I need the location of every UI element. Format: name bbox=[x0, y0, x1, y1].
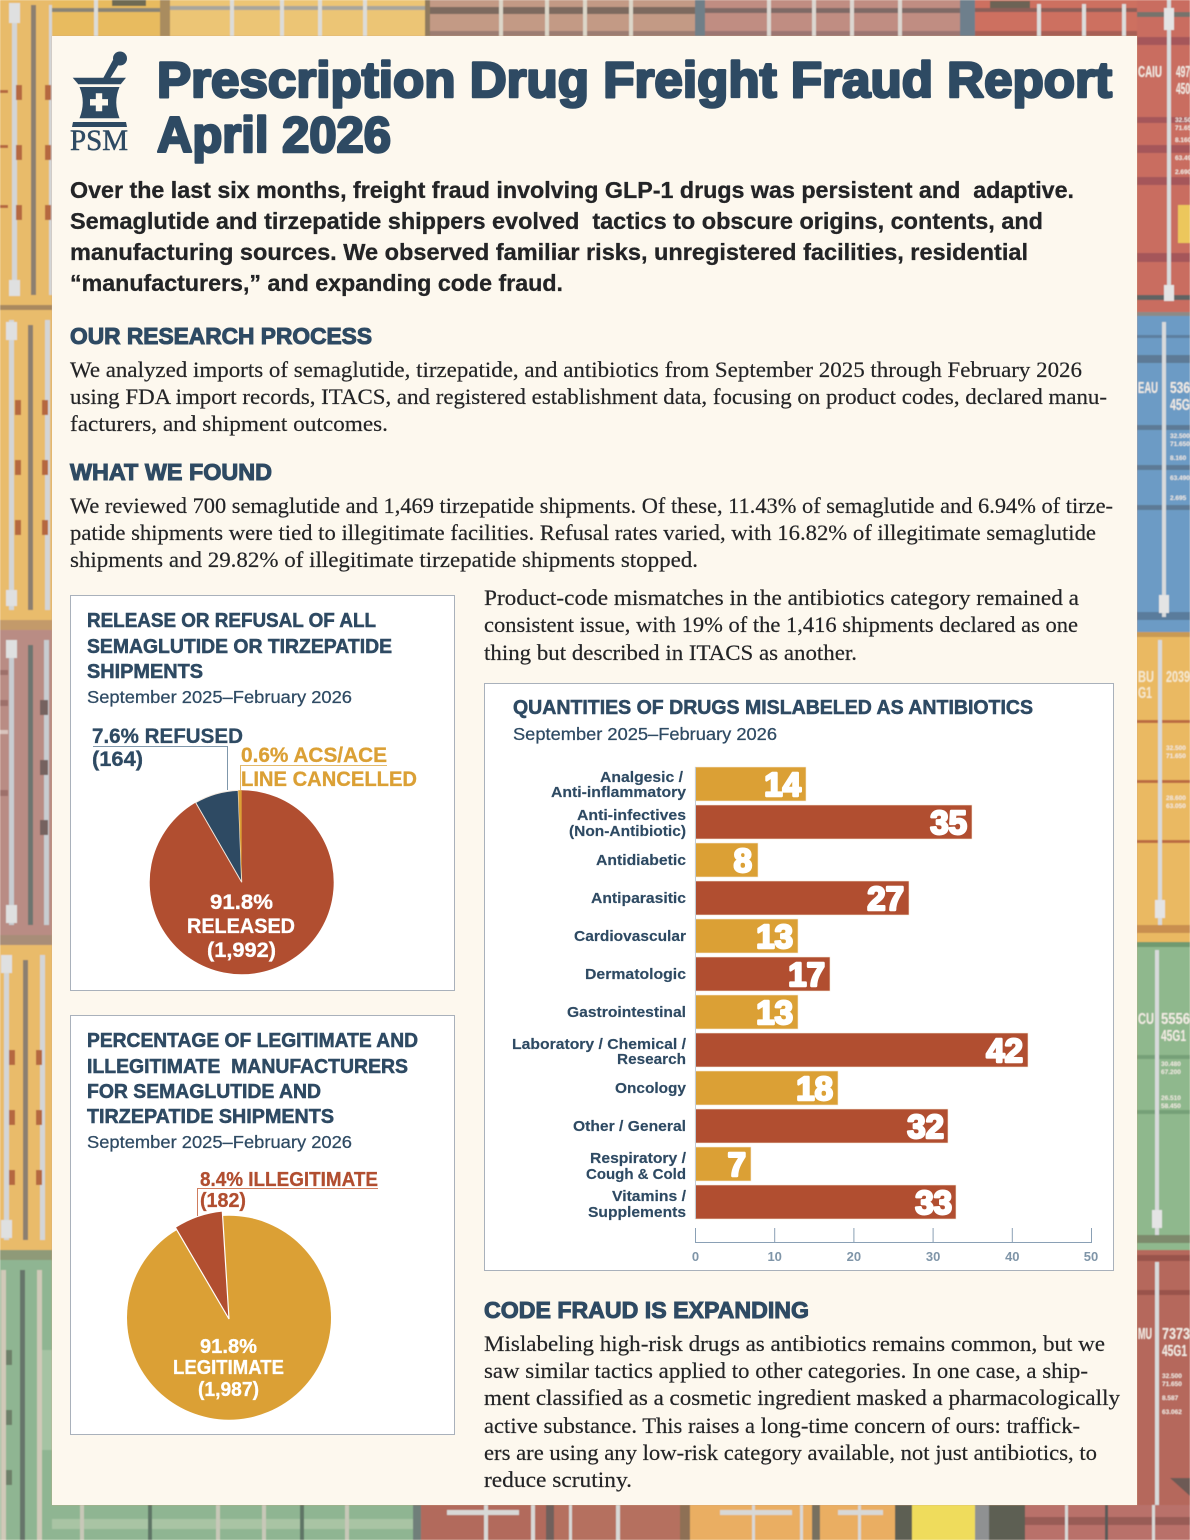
bar chart x axis: 0 bbox=[692, 1249, 699, 1264]
intro summary text bbox=[70, 177, 1074, 296]
chart heading: release or refusal: SHIPMENTS bbox=[87, 661, 203, 683]
background: stacked shipping containers: 8.587 bbox=[1162, 1395, 1179, 1402]
bar value labels: 14 bbox=[764, 766, 802, 803]
intro summary text: Over the last six months, freight fraud involving GLP-1 drugs was persistent and adaptive. bbox=[70, 177, 1074, 203]
bar chart category labels: Analgesic / bbox=[600, 769, 684, 786]
text: code fraud: ment classified as a cosmetic ingredient masked a pharmacologically bbox=[484, 1385, 1120, 1410]
background: stacked shipping containers: 26.510 bbox=[1161, 1095, 1181, 1102]
background: stacked shipping containers: 71.650 bbox=[1170, 441, 1190, 448]
text: product-code mismatches bbox=[484, 585, 1079, 665]
bar value labels: 8 bbox=[734, 842, 752, 879]
background: stacked shipping containers: 58.450 bbox=[1161, 1103, 1181, 1110]
title bbox=[157, 52, 1112, 163]
title: April 2026 bbox=[157, 107, 391, 163]
icon: PSM mortar and pestle logo: PSM bbox=[70, 124, 128, 157]
bar chart x axis: 10 bbox=[767, 1249, 782, 1264]
bar chart x axis: 30 bbox=[926, 1249, 940, 1264]
bar chart category labels: (Non-Antibiotic) bbox=[569, 823, 686, 840]
background: stacked shipping containers: 71.650 bbox=[1166, 753, 1186, 760]
bar chart category labels: Oncology bbox=[615, 1080, 687, 1097]
text: code fraud: ers are using any low-risk category available, not just antibiotics, to bbox=[484, 1440, 1097, 1465]
pie chart: legitimate and illegitimate bbox=[127, 1211, 331, 1420]
text: code fraud bbox=[484, 1331, 1120, 1492]
text: research process: We analyzed imports of semaglutide, tirzepatide, and antibiotics from September 2025 through February 2026 bbox=[70, 357, 1082, 382]
title: Prescription Drug Freight Fraud Report bbox=[157, 52, 1112, 108]
bar value labels: 35 bbox=[930, 804, 967, 841]
bar value labels: 42 bbox=[986, 1032, 1023, 1069]
chart heading: release or refusal bbox=[87, 610, 392, 707]
background: stacked shipping containers: CAIU bbox=[1138, 64, 1162, 81]
text: findings: We reviewed 700 semaglutide and 1,469 tirzepatide shipments. Of these, 11.43% of semaglutide and 6.94% of tirze- bbox=[70, 493, 1113, 518]
bar value labels: 33 bbox=[915, 1184, 952, 1221]
text: code fraud: saw similar tactics applied to other categories. In one case, a ship- bbox=[484, 1358, 1088, 1383]
bar value labels: 27 bbox=[867, 880, 904, 917]
text: research process bbox=[70, 357, 1107, 436]
text: code fraud: active substance. This raises a long-time concern of ours: traffick- bbox=[484, 1413, 1080, 1438]
intro summary text: Semaglutide and tirzepatide shippers evolved tactics to obscure origins, contents, and bbox=[70, 208, 1043, 234]
background: stacked shipping containers: 28.600 bbox=[1166, 795, 1186, 802]
text: findings: shipments and 29.82% of illegitimate tirzepatide shipments stopped. bbox=[70, 547, 698, 572]
chart heading: manufacturers: ILLEGITIMATE MANUFACTURERS bbox=[87, 1056, 408, 1078]
text: product-code mismatches: consistent issue, with 19% of the 1,416 shipments declared as one bbox=[484, 612, 1078, 637]
pie label: legitimate: LEGITIMATE bbox=[173, 1357, 284, 1379]
text: findings: patide shipments were tied to illegitimate facilities. Refusal rates varied, with 16.82% of illegitimate semaglutide bbox=[70, 520, 1096, 545]
bar chart category labels: Laboratory / Chemical / bbox=[512, 1036, 687, 1053]
background: stacked shipping containers: 8.160 bbox=[1170, 455, 1187, 462]
panel: mislabeled drug quantities bar chart bbox=[484, 684, 1114, 1270]
background: stacked shipping containers: CU bbox=[1138, 1011, 1154, 1028]
background: stacked shipping containers: 32.500 bbox=[1162, 1373, 1182, 1380]
background: stacked shipping containers: 71.650 bbox=[1162, 1381, 1182, 1388]
background: stacked shipping containers: 30.480 bbox=[1161, 1061, 1181, 1068]
text: research process: using FDA import records, ITACS, and registered establishment data, focusing on product codes, declared manu- bbox=[70, 384, 1107, 409]
pie label: released: RELEASED bbox=[187, 915, 295, 938]
background: stacked shipping containers: 32.500 bbox=[1170, 433, 1190, 440]
chart heading: manufacturers: TIRZEPATIDE SHIPMENTS bbox=[87, 1106, 334, 1128]
text: product-code mismatches: Product-code mismatches in the antibiotics category remained a bbox=[484, 585, 1079, 610]
bar value labels bbox=[728, 766, 1023, 1221]
heading: what we found: WHAT WE FOUND bbox=[70, 459, 272, 485]
text: research process: facturers, and shipment outcomes. bbox=[70, 411, 388, 436]
bar chart category labels: Antidiabetic bbox=[596, 852, 686, 869]
background: stacked shipping containers: G1 bbox=[1138, 685, 1152, 702]
callout: ACS/ACE line cancelled: LINE CANCELLED bbox=[241, 768, 417, 791]
background: stacked shipping containers: 63.062 bbox=[1162, 1409, 1182, 1416]
background: stacked shipping containers: BU bbox=[1138, 669, 1154, 686]
bar value labels: 7 bbox=[728, 1146, 746, 1183]
bar value labels: 17 bbox=[788, 956, 825, 993]
bar chart category labels: Other / General bbox=[573, 1118, 686, 1135]
bar chart category labels: Gastrointestinal bbox=[567, 1004, 686, 1021]
pie label: released bbox=[187, 891, 295, 962]
bar value labels: 18 bbox=[796, 1070, 833, 1107]
bar value labels: 13 bbox=[756, 994, 793, 1031]
bar value labels: 32 bbox=[907, 1108, 944, 1145]
pie label: legitimate: 91.8% bbox=[200, 1336, 257, 1358]
text: code fraud: Mislabeling high-risk drugs as antibiotics remains common, but we bbox=[484, 1331, 1105, 1356]
callout: refused: 7.6% REFUSED bbox=[92, 725, 243, 748]
heading: our research process: OUR RESEARCH PROCESS bbox=[70, 323, 372, 349]
bar chart bars bbox=[695, 767, 1028, 1219]
chart heading: release or refusal: SEMAGLUTIDE OR TIRZEPATIDE bbox=[87, 636, 392, 658]
callout: illegitimate: (182) bbox=[200, 1190, 246, 1212]
pie chart: released, refused, cancelled bbox=[150, 790, 334, 974]
bar chart x axis: 20 bbox=[847, 1249, 861, 1264]
chart heading: manufacturers bbox=[87, 1030, 418, 1152]
background: stacked shipping containers: 32.500 bbox=[1166, 745, 1186, 752]
callout: illegitimate: 8.4% ILLEGITIMATE bbox=[200, 1169, 378, 1191]
bar chart category labels: Research bbox=[617, 1051, 686, 1068]
background: stacked shipping containers: 67.200 bbox=[1161, 1069, 1181, 1076]
text: code fraud: reduce scrutiny. bbox=[484, 1467, 632, 1492]
bar chart category labels: Antiparasitic bbox=[591, 890, 686, 907]
bar chart category labels: Anti-infectives bbox=[577, 807, 686, 824]
bar chart category labels bbox=[512, 769, 687, 1221]
bar chart category labels: Cardiovascular bbox=[574, 928, 686, 945]
background: stacked shipping containers: 63.050 bbox=[1166, 803, 1186, 810]
background: stacked shipping containers: MU bbox=[1138, 1326, 1152, 1343]
panel: legitimate and illegitimate manufacturers pie chart bbox=[70, 1016, 454, 1434]
chart heading: quantities mislabeled: September 2025–February 2026 bbox=[513, 724, 777, 744]
intro summary text: manufacturing sources. We observed familiar risks, unregistered facilities, residential bbox=[70, 239, 1028, 265]
chart heading: quantities mislabeled bbox=[513, 697, 1033, 744]
chart heading: release or refusal: RELEASE OR REFUSAL OF ALL bbox=[87, 610, 376, 632]
pie label: released: 91.8% bbox=[210, 891, 273, 914]
chart heading: manufacturers: FOR SEMAGLUTIDE AND bbox=[87, 1081, 321, 1103]
bar chart x axis: 50 bbox=[1084, 1249, 1098, 1264]
pie label: legitimate bbox=[173, 1336, 284, 1401]
callout: ACS/ACE line cancelled: 0.6% ACS/ACE bbox=[241, 744, 387, 767]
text: product-code mismatches: thing but described in ITACS as another. bbox=[484, 640, 857, 665]
bar chart category labels: Vitamins / bbox=[612, 1188, 687, 1205]
bar chart category labels: Supplements bbox=[588, 1204, 686, 1221]
bar chart category labels: Anti-inflammatory bbox=[551, 784, 687, 801]
background: stacked shipping containers: 2.695 bbox=[1170, 495, 1187, 502]
bar value labels: 13 bbox=[756, 918, 793, 955]
bar chart category labels: Respiratory / bbox=[590, 1150, 687, 1167]
intro summary text: “manufacturers,” and expanding code fraud. bbox=[70, 270, 563, 296]
background: stacked shipping containers: 63.490 bbox=[1170, 475, 1190, 482]
chart heading: manufacturers: PERCENTAGE OF LEGITIMATE AND bbox=[87, 1030, 418, 1052]
callout: refused: (164) bbox=[92, 748, 143, 771]
panel: release or refusal pie chart bbox=[70, 596, 454, 990]
background: stacked shipping containers: EAU bbox=[1138, 380, 1158, 397]
bar chart category labels: Cough & Cold bbox=[586, 1166, 686, 1183]
callout: refused bbox=[92, 725, 243, 790]
pie label: legitimate: (1,987) bbox=[198, 1379, 259, 1401]
chart heading: manufacturers: September 2025–February 2026 bbox=[87, 1132, 352, 1152]
bar chart x axis bbox=[692, 767, 1098, 1264]
text: findings bbox=[70, 493, 1113, 572]
chart heading: quantities mislabeled: QUANTITIES OF DRUGS MISLABELED AS ANTIBIOTICS bbox=[513, 697, 1033, 719]
heading: code fraud is expanding: CODE FRAUD IS EXPANDING bbox=[484, 1297, 809, 1323]
bar chart x axis: 40 bbox=[1005, 1249, 1020, 1264]
bar chart category labels: Dermatologic bbox=[585, 966, 686, 983]
callout: illegitimate bbox=[198, 1169, 378, 1216]
pie label: released: (1,992) bbox=[207, 939, 276, 962]
callout: ACS/ACE line cancelled bbox=[240, 744, 417, 791]
chart heading: release or refusal: September 2025–February 2026 bbox=[87, 687, 352, 707]
icon: PSM mortar and pestle logo bbox=[70, 52, 128, 157]
